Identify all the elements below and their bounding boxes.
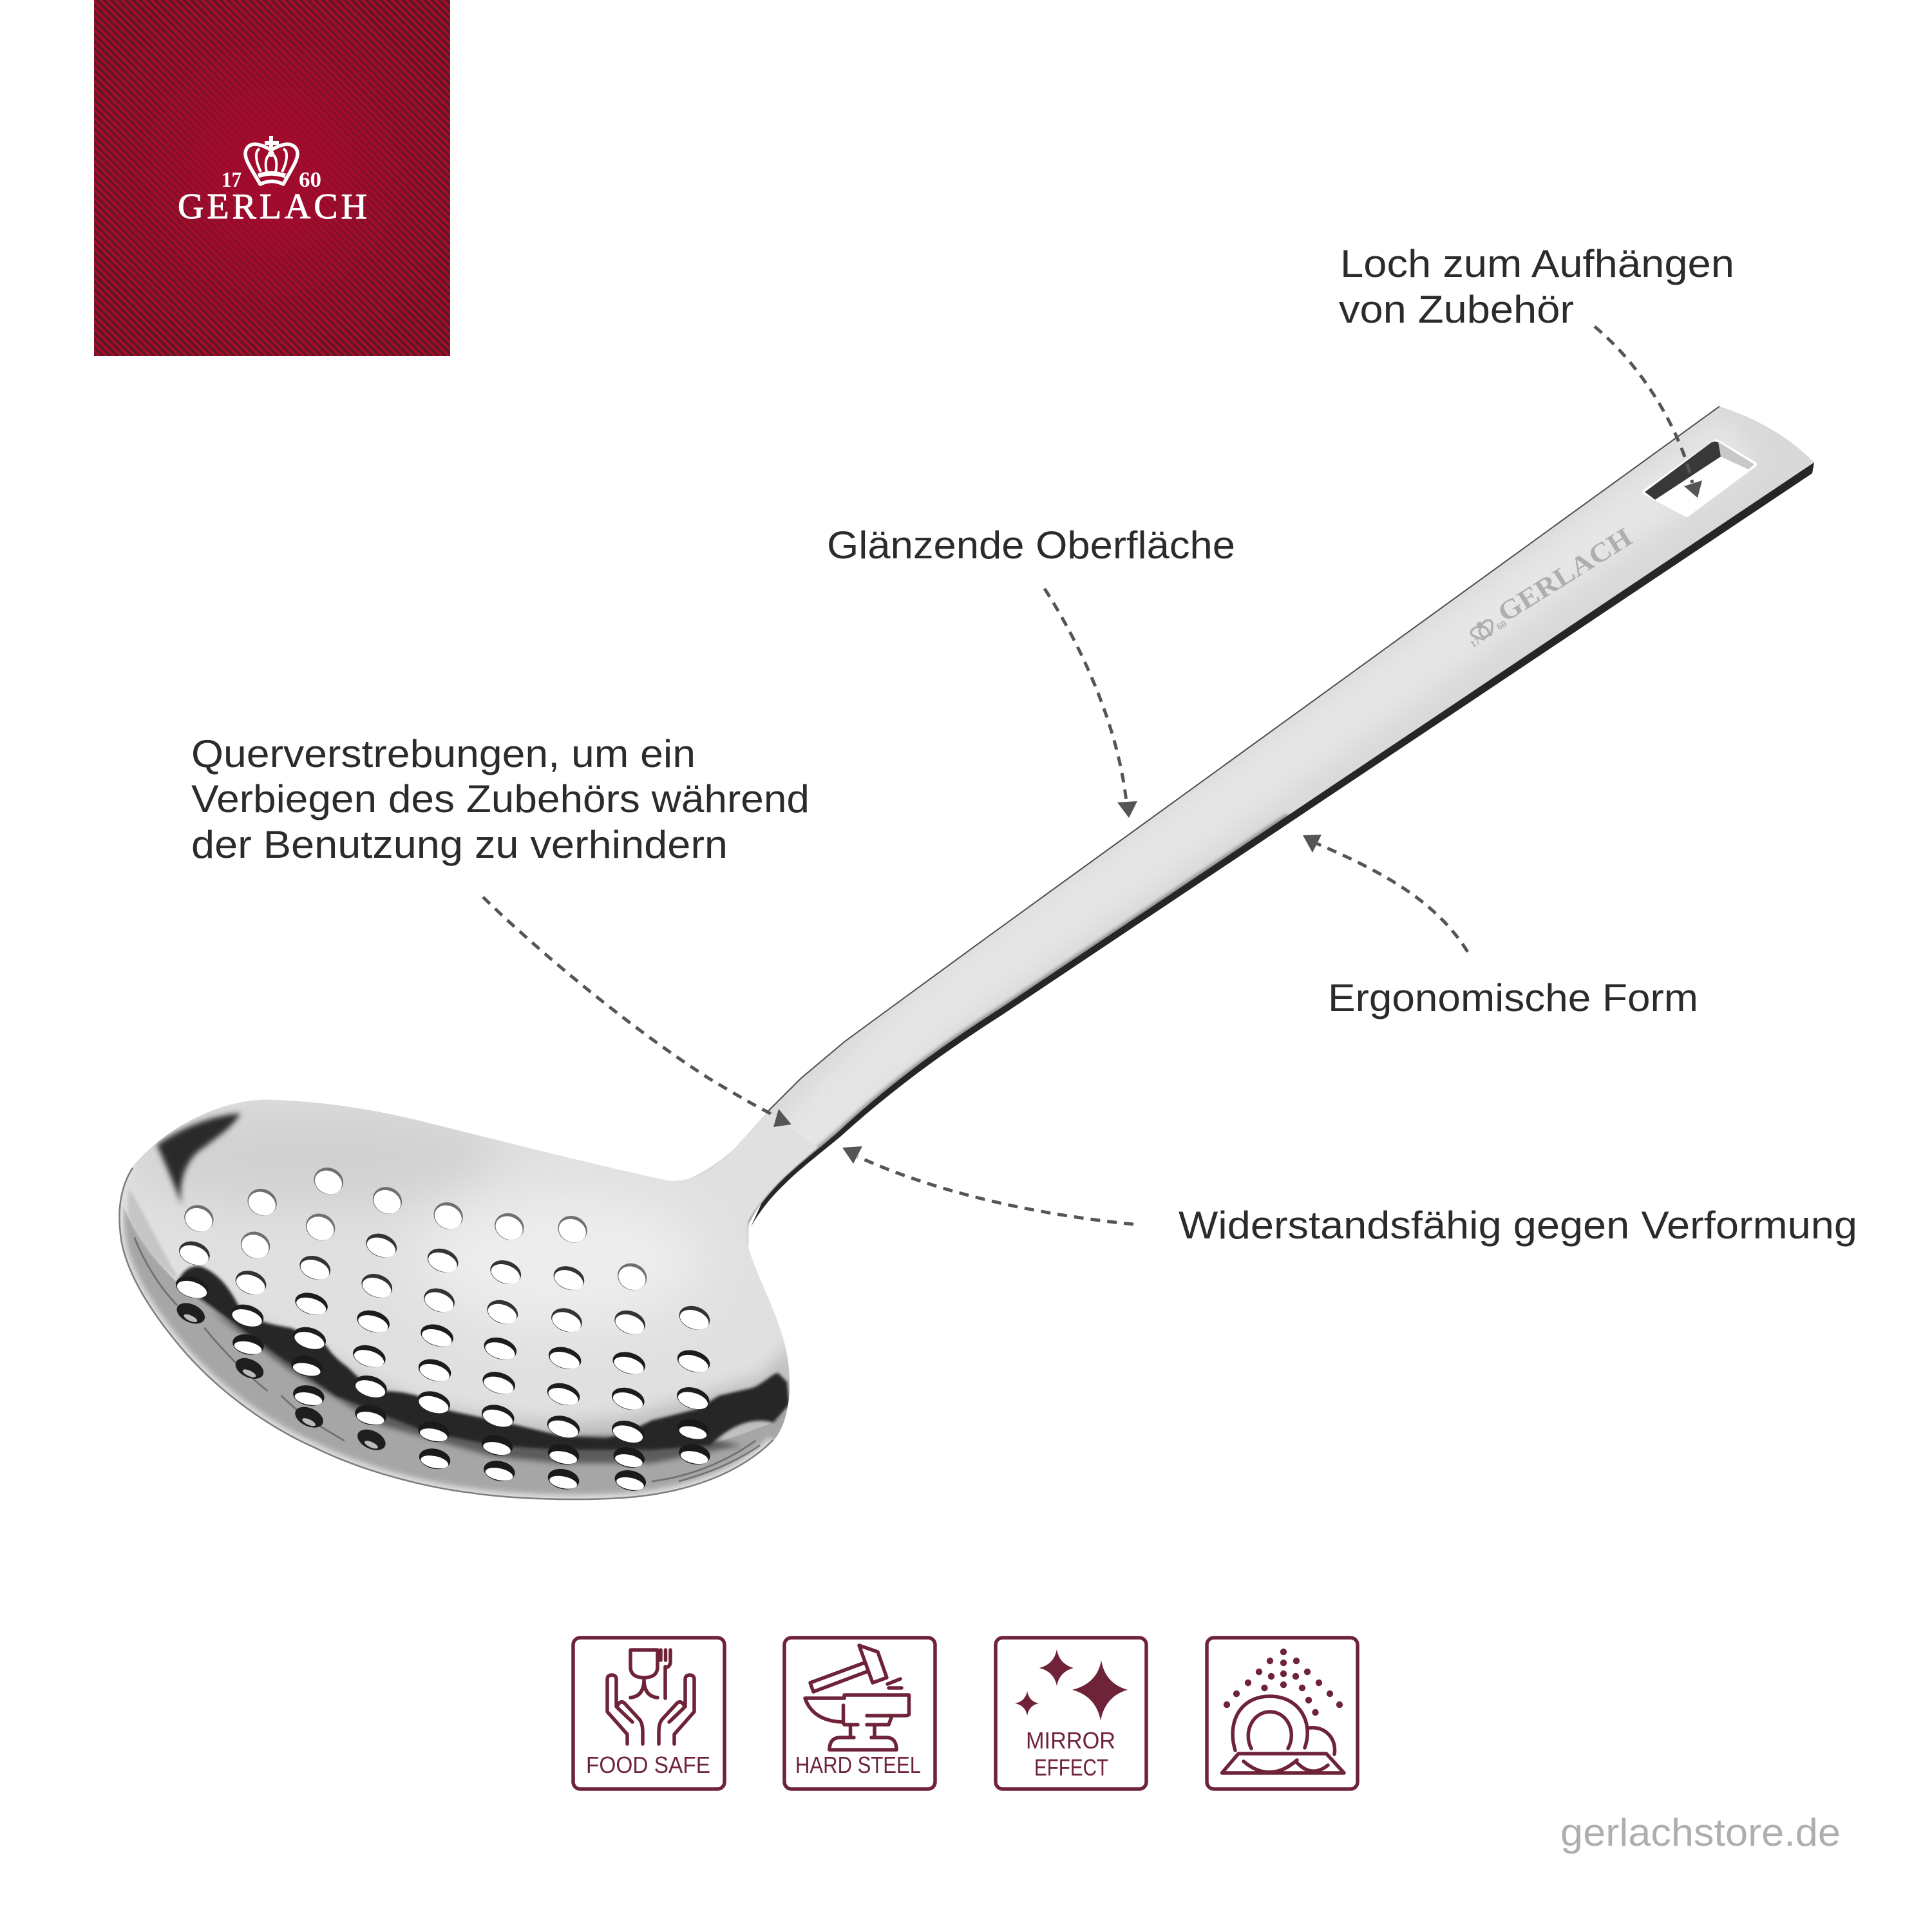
badge text <box>1026 1727 1115 1781</box>
badge text: EFFECT <box>1034 1754 1108 1781</box>
logo panel <box>94 0 450 356</box>
callout: deformation resistant <box>842 1146 1857 1247</box>
callout: deformation resistant: Widerstandsfähig gegen Verformung <box>1179 1204 1857 1247</box>
callout: shiny surface: Glänzende Oberfläche <box>827 524 1235 567</box>
callout: hanging hole <box>1339 242 1734 498</box>
brand name: GERLACH <box>178 187 367 227</box>
badge: mirror effect <box>996 1638 1146 1789</box>
callout: shiny surface <box>827 524 1235 818</box>
founding year: 17 <box>222 168 242 192</box>
grey band under reflection <box>209 1310 742 1463</box>
handle face <box>670 406 1814 1256</box>
dark lower reflection <box>177 1266 790 1450</box>
arrow <box>1303 835 1468 952</box>
rim and ripples <box>122 1206 775 1499</box>
hanging hole <box>1645 442 1754 515</box>
engraved brand on handle: GERLACH <box>1493 522 1637 628</box>
logo mark: 60 <box>299 168 321 192</box>
engraved brand on handle <box>1468 522 1637 650</box>
badge: food safe: FOOD SAFE <box>586 1752 710 1778</box>
skimmer bowl <box>118 1100 818 1501</box>
handle dark edge <box>751 462 1814 1227</box>
arrow <box>483 897 791 1127</box>
strainer holes <box>173 1163 714 1493</box>
logo mark <box>178 136 367 227</box>
crown icon <box>245 136 298 184</box>
upper-left reflection <box>157 1113 240 1206</box>
website url: gerlachstore.de <box>1560 1811 1841 1854</box>
callout: ergonomic shape <box>1303 835 1698 1019</box>
icon: hands, glass and fork <box>607 1650 694 1744</box>
callout: ergonomic shape: Ergonomische Form <box>1328 976 1698 1019</box>
badge: food safe <box>573 1638 724 1789</box>
icon: hammer and anvil <box>805 1645 909 1750</box>
lower rim zone <box>121 1206 787 1501</box>
label text <box>1339 242 1734 331</box>
icon: dishes and water drops <box>1222 1649 1344 1773</box>
arrow <box>1595 327 1702 498</box>
engraved brand on handle: 17 <box>1469 636 1482 650</box>
arrow <box>842 1146 1133 1224</box>
engraved crown <box>1468 616 1497 643</box>
badge: dishwasher safe <box>1207 1638 1358 1789</box>
label text <box>191 732 810 866</box>
ladle product <box>109 406 1814 1540</box>
label text: Querverstrebungen, um ein <box>191 732 696 775</box>
callout: cross struts <box>191 732 810 1127</box>
label text: Loch zum Aufhängen <box>1340 242 1734 285</box>
badge text: MIRROR <box>1026 1727 1115 1754</box>
label text: Verbiegen des Zubehörs während <box>191 777 810 820</box>
badge: hard steel <box>784 1638 935 1789</box>
label text: von Zubehör <box>1339 288 1574 331</box>
engraved brand on handle: 60 <box>1495 619 1509 632</box>
icon: sparkles <box>1015 1649 1128 1721</box>
label text: der Benutzung zu verhindern <box>191 823 728 866</box>
arrow <box>1045 589 1137 818</box>
badge: hard steel: HARD STEEL <box>795 1752 921 1778</box>
